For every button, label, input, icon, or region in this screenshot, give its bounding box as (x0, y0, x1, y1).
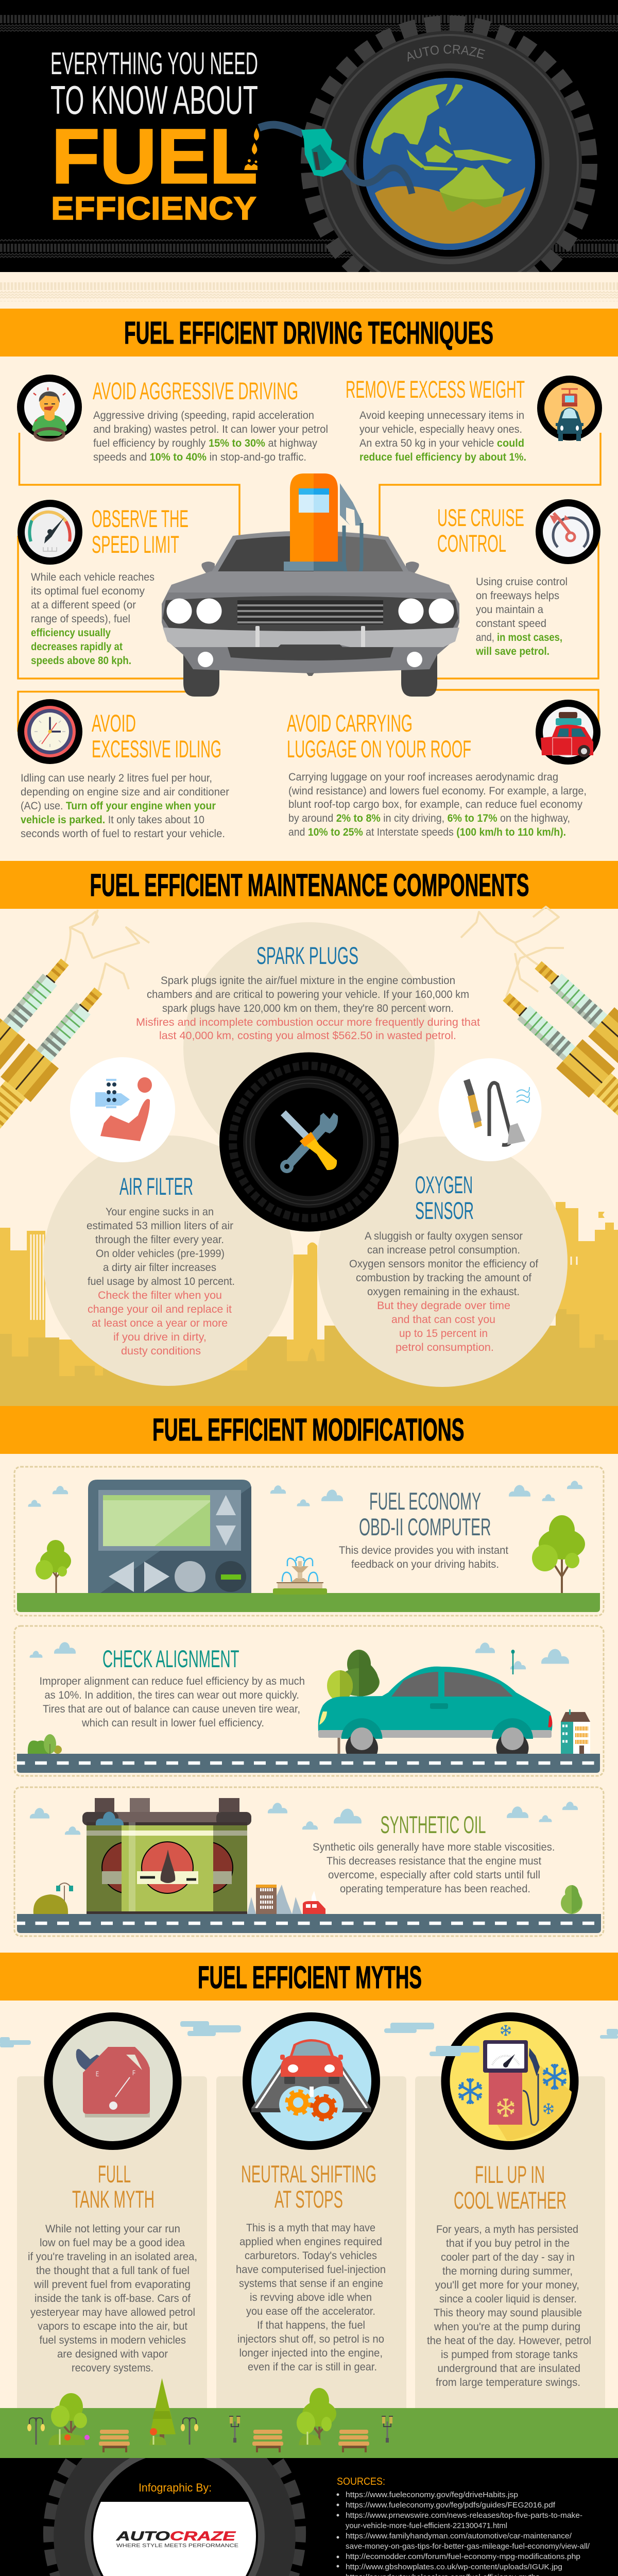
heading (287, 709, 471, 762)
body text: change your oil and replace it (88, 1303, 232, 1315)
icon: angry driver (21, 378, 78, 440)
body text: if you drive in dirty, (113, 1331, 207, 1343)
body text: and 10% to 25% at Interstate speeds (100 km/h to 110 km/h). (288, 826, 566, 838)
body text: Improper alignment can reduce fuel efficiency by as much (39, 1675, 305, 1687)
icon: fountain (273, 1557, 327, 1595)
icon: benches (99, 2430, 369, 2452)
body text: (wind resistance) and lowers fuel economy. For example, a large, (288, 785, 587, 797)
body text: the heat of the day. However, petrol (427, 2335, 591, 2347)
list bullets (337, 2494, 339, 2576)
panel: fill up in cool weather (415, 2016, 605, 2408)
body text: petrol consumption. (396, 1342, 494, 1353)
icon: tire and earth: AUTO CRAZE (408, 44, 485, 62)
body text: the morning during summer, (442, 2265, 573, 2277)
body text: A sluggish or faulty oxygen sensor (365, 1230, 523, 1242)
sources list: save-money-on-gas-tips-for-better-gas-mileage-fuel-economy/view-all/ (346, 2542, 590, 2551)
body text: On older vehicles (pre-1999) (96, 1248, 225, 1260)
icon: cruise dial (539, 503, 597, 561)
heading (92, 505, 188, 558)
infographic by label: Infographic By: (139, 2481, 212, 2494)
body text (28, 2223, 197, 2374)
heading: USE CRUISE (437, 504, 524, 531)
heading: SPARK PLUGS (256, 942, 358, 969)
body text: constant speed (476, 618, 546, 630)
body text: vehicle is parked. It only takes about 10 (21, 814, 204, 826)
title (50, 46, 258, 227)
body text (339, 1545, 508, 1570)
body text: Avoid keeping unnecessary items in (359, 410, 524, 421)
logo: AUTO CRAZE (116, 2529, 236, 2544)
sources heading: SOURCES: (337, 2476, 385, 2487)
cream tread band (0, 282, 618, 301)
clouds (0, 2021, 618, 2047)
icon: clock (18, 699, 82, 764)
icon: park tree (51, 2393, 87, 2445)
heading: FILL UP IN (475, 2161, 545, 2188)
heading: AVOID (92, 709, 136, 737)
sources list: https://www.fueleconomy.gov/feg/pdfs/guides/FEG2016.pdf (346, 2501, 556, 2510)
heading (359, 1487, 491, 1540)
icon: fuel drops (244, 128, 259, 170)
heading (72, 2160, 154, 2213)
body text: reduce fuel efficiency by about 1%. (359, 451, 526, 463)
body text: if you're traveling in an isolated area, (28, 2251, 197, 2263)
sources list (346, 2490, 590, 2576)
heading (92, 709, 221, 762)
body text: carburetors. Today's vehicles (245, 2250, 377, 2262)
icon: pine tree (150, 2378, 176, 2445)
body text: applied when engines required (239, 2236, 382, 2248)
body text: yesteryear may have allowed petrol (30, 2307, 195, 2318)
body text: that if you buy petrol in the (446, 2238, 570, 2249)
body text: inside the tank is off-base. Cars of (35, 2293, 191, 2304)
body text: Synthetic oils generally have more stable viscosities. (313, 1841, 555, 1853)
body text: last 40,000 km, costing you almost $562.50 in wasted petrol. (159, 1030, 456, 1042)
body text: at least once a year or more (92, 1317, 228, 1329)
icon: lamps (27, 2416, 393, 2445)
icon: fuel pump with snowflakes (445, 2016, 574, 2145)
body text: which can result in lower fuel efficiency. (81, 1717, 264, 1729)
body text: underground that are insulated (438, 2363, 580, 2375)
body text: a dirty air filter increases (103, 1262, 216, 1274)
body text: overcome, especially after cold starts until full (328, 1869, 540, 1881)
body text: and braking) wastes petrol. It can lower your petrol (93, 423, 328, 435)
body text: decreases rapidly at (31, 641, 123, 653)
body text: vapors to escape into the air, but (38, 2320, 187, 2332)
body text: when you're at the pump during (434, 2321, 580, 2333)
fuel pump (284, 473, 362, 580)
section heading: modifications (0, 1406, 618, 1454)
body text (236, 2222, 386, 2373)
body text: While not letting your car run (45, 2223, 180, 2235)
body text: up to 15 percent in (399, 1328, 488, 1340)
body text: While each vehicle reaches (31, 571, 154, 583)
heading: OBSERVE THE (92, 505, 188, 532)
park strip (0, 2378, 618, 2458)
heading: AT STOPS (274, 2185, 343, 2213)
icon: building (561, 1709, 590, 1754)
body text: you maintain a (476, 604, 543, 616)
footer panel (0, 2458, 618, 2576)
body text: speeds and 10% to 40% in stop-and-go traffic. (93, 451, 306, 463)
logo (88, 2502, 263, 2576)
body text: is revving above idle when (250, 2292, 372, 2303)
panel: synthetic oil (14, 1787, 604, 1936)
title: FUEL (52, 113, 258, 199)
title: EVERYTHING YOU NEED (50, 46, 258, 81)
icon: teal car (318, 1650, 552, 1754)
body text (288, 771, 587, 838)
body text (93, 410, 328, 463)
body text: systems that sense if an engine (239, 2278, 383, 2290)
heading: FULL (98, 2160, 131, 2188)
body text: This device provides you with instant (339, 1545, 508, 1556)
body text: For years, a myth has persisted (436, 2224, 578, 2235)
fog lights (198, 652, 422, 667)
body text: Tires that are out of balance can cause uneven tire wear, (43, 1703, 300, 1715)
panel: avoid carrying luggage on your roof (287, 703, 597, 838)
body text: fuel efficiency by roughly 15% to 30% at highway (93, 437, 317, 449)
body text (475, 576, 568, 657)
body text: low on fuel may be a good idea (40, 2237, 185, 2249)
body text: seconds worth of fuel to restart your vehicle. (21, 828, 225, 840)
icon: bushes and flowers (48, 2428, 321, 2445)
icon: speedometer (21, 503, 79, 561)
panel: remove excess weight (346, 376, 598, 463)
body text: operating temperature has been reached. (340, 1883, 530, 1895)
body text: Check the filter when you (98, 1290, 222, 1301)
icon: small tree (36, 1540, 71, 1593)
ground (17, 1593, 600, 1612)
icon: tire with wrench and screwdriver (219, 1052, 399, 1231)
icon: right tree (561, 1885, 582, 1914)
heading: FUEL ECONOMY (369, 1487, 481, 1515)
body text: efficiency usually (31, 627, 111, 639)
icon: town and van (247, 1885, 325, 1914)
body text (313, 1841, 555, 1895)
section heading: driving techniques (0, 309, 618, 357)
title: TO KNOW ABOUT (50, 77, 258, 123)
panel: spark plugs (136, 922, 480, 1174)
icon: tire with logo (51, 2458, 298, 2576)
body text (349, 1230, 538, 1353)
body text: through the filter every year. (95, 1234, 224, 1246)
icon: second park tree (297, 2388, 336, 2445)
icon: jerry can: F (132, 2069, 135, 2077)
panel: avoid aggressive driving (21, 377, 328, 463)
body text: injectors shut off, so petrol is no (237, 2333, 384, 2345)
icon: oil barrel (82, 1798, 251, 1914)
clouds (30, 1802, 578, 1835)
body text: Carrying luggage on your roof increases aerodynamic drag (288, 771, 558, 783)
body text: is pumped from storage tanks (441, 2349, 578, 2361)
section heading: myths: FUEL EFFICIENT MYTHS (198, 1960, 422, 1995)
sources list: https://www.fueleconomy.gov/feg/driveHabits.jsp (346, 2490, 518, 2499)
body text: (AC) use. Turn off your engine when your (21, 800, 216, 812)
body text (39, 1675, 305, 1729)
icon: OBD computer (88, 1480, 251, 1593)
body text: Spark plugs ignite the air/fuel mixture in the engine combustion (161, 975, 455, 987)
city skyline (0, 1202, 618, 1406)
road (17, 1754, 600, 1773)
heading (415, 1171, 474, 1224)
clouds (28, 1481, 582, 1507)
body text: This decreases resistance that the engine must (327, 1855, 541, 1867)
body text: Using cruise control (476, 576, 568, 588)
icon: tire and earth (301, 15, 597, 272)
title: EFFICIENCY (51, 191, 256, 227)
body text: by around 2% to 8% in city driving, 6% to 17% on the highway, (288, 812, 570, 824)
cloud over pump icon (430, 2046, 479, 2056)
icon: car with roof load (541, 379, 598, 441)
body text: you'll get more for your money, (435, 2279, 579, 2291)
icon: jerry can (48, 2016, 177, 2145)
body text: you ease off the accelerator. (246, 2306, 375, 2317)
icon: spark plugs right (493, 951, 618, 1163)
body text: and that can cost you (391, 1314, 495, 1326)
heading: SENSOR (415, 1197, 474, 1224)
heading (454, 2161, 566, 2214)
car body (162, 571, 459, 673)
body text: fuel usage by almost 10 percent. (88, 1276, 235, 1287)
panel: oxygen sensor (317, 1058, 568, 1387)
body text: even if the car is still in gear. (248, 2361, 377, 2373)
body text (427, 2224, 591, 2388)
clouds (30, 1642, 569, 1669)
body text: recovery systems. (72, 2362, 153, 2374)
body text: spark plugs have 120,000 km on them, they're 80 percent worn. (162, 1003, 454, 1014)
body text: will save petrol. (475, 646, 550, 657)
sources list: http://www.gbshowplates.co.uk/wp-content/uploads/IGUK.jpg (346, 2563, 562, 2571)
heading: SYNTHETIC OIL (380, 1811, 486, 1838)
body text: chambers and are critical to powering your vehicle. If your 160,000 km (147, 989, 469, 1001)
body text: estimated 53 million liters of air (87, 1220, 233, 1232)
body text: can increase petrol consumption. (367, 1244, 520, 1256)
icon: large tree (532, 1515, 585, 1593)
body text: range of speeds), fuel (31, 613, 130, 625)
heading: CONTROL (437, 530, 506, 557)
car mirrors (201, 562, 419, 573)
body text: and, in most cases, (476, 632, 562, 643)
sources list: http://ecomodder.com/forum/fuel-economy-mpg-modifications.php (346, 2552, 580, 2561)
heading: SPEED LIMIT (92, 531, 179, 558)
body text: Your engine sucks in an (106, 1206, 214, 1218)
icon: bushes (28, 1734, 62, 1754)
body text: dusty conditions (121, 1345, 201, 1357)
body text: oxygen remaining in the exhaust. (367, 1286, 520, 1298)
heading: AIR FILTER (119, 1173, 193, 1200)
panel: air filter (43, 1057, 294, 1386)
body text: If that happens, the fuel (257, 2319, 365, 2331)
body text (87, 1206, 235, 1357)
panel: observe the speed limit (21, 503, 188, 667)
body text: cooler part of the day - say in (441, 2251, 575, 2263)
body text: feedback on your driving habits. (351, 1558, 499, 1570)
headlights (167, 599, 454, 623)
section heading: maintenance components (0, 861, 618, 909)
body text: Misfires and incomplete combustion occur more frequently during that (136, 1016, 480, 1028)
body text: fuel systems in modern vehicles (39, 2334, 186, 2346)
body text: This theory may sound plausible (434, 2307, 582, 2319)
heading: OXYGEN (415, 1171, 473, 1198)
bumper (163, 628, 459, 647)
icon: air filter (70, 1057, 175, 1162)
body text: blunt roof-top cargo box, for example, can reduce fuel economy (288, 799, 582, 810)
icon: car with luggage (539, 703, 597, 761)
header panel (0, 0, 618, 272)
heading: EXCESSIVE IDLING (92, 735, 221, 762)
icon: oxygen sensor (439, 1058, 542, 1161)
body text: Oxygen sensors monitor the efficiency of (349, 1258, 538, 1270)
icon: trees by car (327, 1650, 380, 1754)
illustration: fuel pump on car (162, 473, 459, 697)
heading (241, 2160, 376, 2213)
body text (31, 571, 154, 667)
body text: at a different speed (or (31, 599, 136, 611)
icon: fuel nozzle and hose (259, 125, 412, 194)
connector lines (18, 433, 600, 732)
body text: This is a myth that may have (246, 2222, 375, 2234)
body text: combustion by tracking the amount of (356, 1272, 531, 1284)
road (17, 1914, 601, 1933)
heading: CHECK ALIGNMENT (102, 1645, 239, 1672)
body text: An extra 50 kg in your vehicle could (359, 437, 524, 449)
body text: your vehicle, especially heavy ones. (359, 423, 522, 435)
section heading: myths (0, 1953, 618, 2001)
icon: car on road with gears (247, 2016, 376, 2145)
sources list: https://www.prnewswire.com/news-releases/top-five-parts-to-make- (346, 2511, 582, 2520)
car grille (163, 596, 458, 632)
panel: OBD-II computer (14, 1467, 604, 1616)
heading: OBD-II COMPUTER (359, 1513, 491, 1540)
heading (437, 504, 524, 557)
heading: AVOID CARRYING (287, 709, 413, 737)
panel: avoid excessive idling (18, 699, 229, 840)
decorative lightning (65, 907, 564, 997)
icon: lamp and bush (33, 1883, 73, 1914)
car wheels (183, 649, 437, 697)
body text: longer injected into the engine, (239, 2347, 383, 2359)
body text: But they degrade over time (377, 1300, 510, 1312)
body text (21, 772, 229, 840)
icon: jerry can: E (96, 2070, 99, 2078)
heading: LUGGAGE ON YOUR ROOF (287, 735, 471, 762)
body text: as 10%. In addition, the tires can wear out more quickly. (44, 1689, 299, 1701)
sources list: your-vehicle-more-fuel-efficient-221300471.html (346, 2521, 507, 2530)
body text: from large temperature swings. (436, 2377, 580, 2388)
body text: have computerised fuel-injection (236, 2264, 386, 2276)
icon: spark plugs left (0, 950, 113, 1177)
body text: on freeways helps (476, 590, 559, 602)
body text (359, 410, 526, 463)
heading: TANK MYTH (72, 2185, 154, 2213)
body text: depending on engine size and air conditioner (21, 786, 229, 798)
body text: are designed with vapor (57, 2348, 168, 2360)
body text (136, 975, 480, 1042)
panel: check alignment (14, 1626, 604, 1776)
panel: neutral shifting at stops (216, 2016, 406, 2408)
heading: AVOID AGGRESSIVE DRIVING (93, 377, 298, 404)
body text: will prevent fuel from evaporating (33, 2279, 191, 2291)
body text: since a cooler liquid is denser. (439, 2293, 577, 2305)
body text: its optimal fuel economy (31, 585, 145, 597)
sources list: https://www.familyhandyman.com/automotive/car-maintenance/ (346, 2532, 572, 2540)
heading: NEUTRAL SHIFTING (241, 2160, 376, 2188)
logo: WHERE STYLE MEETS PERFORMANCE (116, 2543, 238, 2549)
panel: full tank myth (17, 2016, 207, 2408)
body text: speeds above 80 kph. (31, 655, 131, 667)
car roof and windshield (211, 531, 410, 573)
body text: Aggressive driving (speeding, rapid acceleration (93, 410, 314, 421)
panel: use cruise control (437, 503, 597, 657)
body text: the thought that a full tank of fuel (36, 2265, 190, 2277)
body text: Idling can use nearly 2 litres fuel per hour, (21, 772, 212, 784)
